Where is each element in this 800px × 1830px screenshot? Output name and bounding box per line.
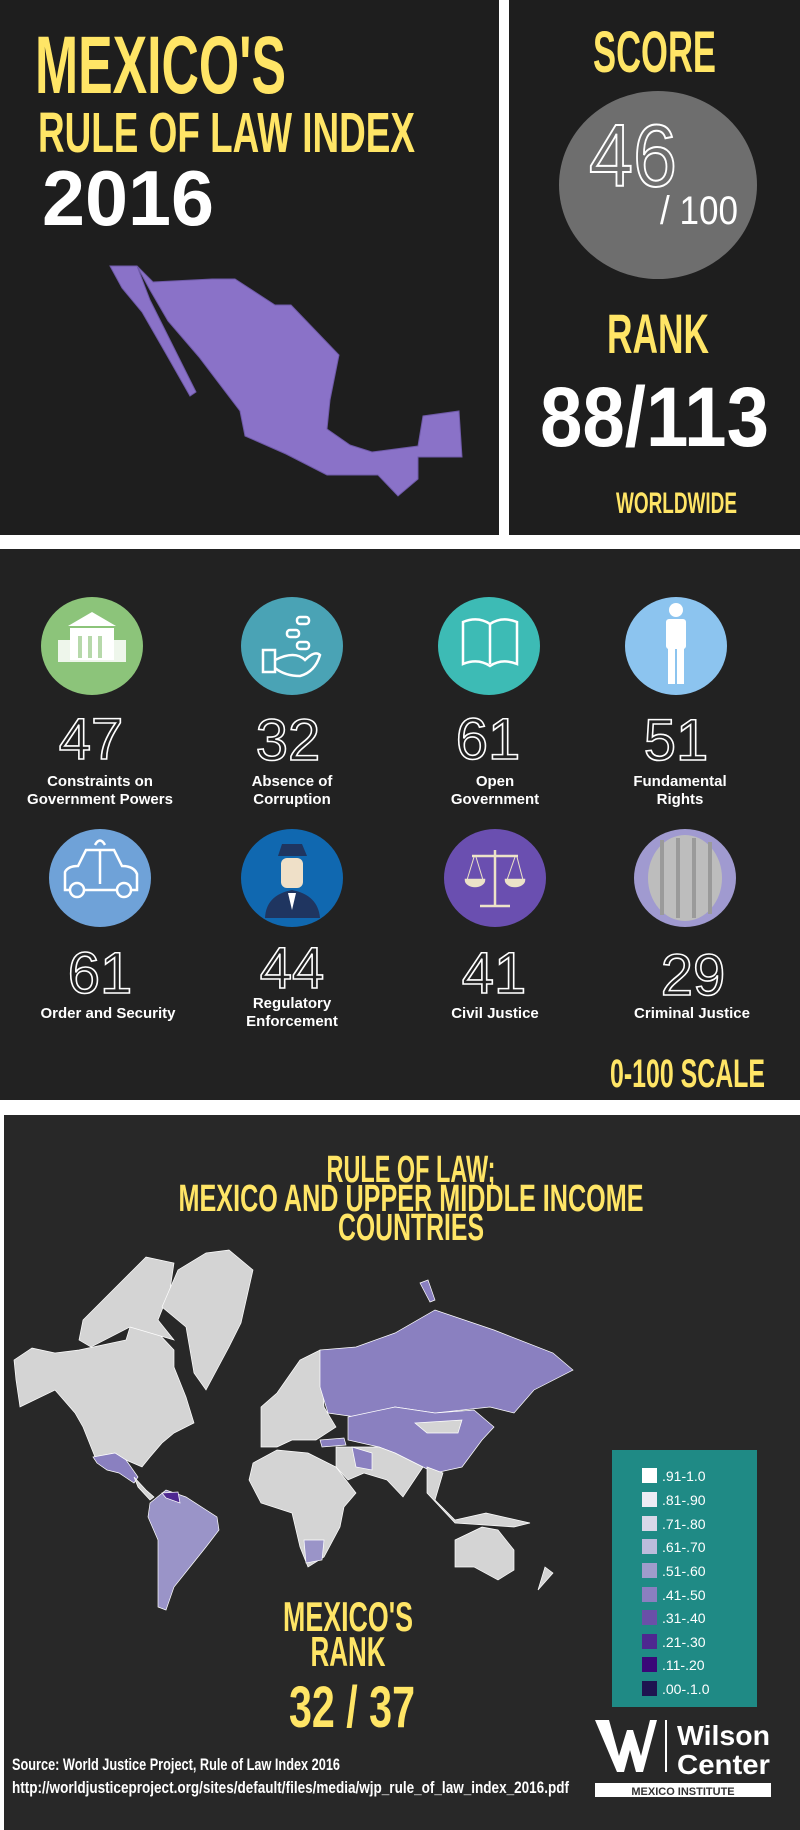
score circle: 46: [589, 106, 677, 205]
logo: wilson center: [595, 1720, 771, 1798]
label: fundamental rights: Fundamental: [633, 773, 727, 790]
legend: .81-.90: [662, 1492, 706, 1508]
panel: title: [0, 0, 499, 535]
logo: wilson center: Center: [677, 1749, 770, 1780]
label: fundamental rights: Rights: [657, 791, 703, 808]
label: civil justice: Civil Justice: [451, 1005, 539, 1022]
label: open government: Government: [451, 791, 539, 808]
legend: .11-.20: [662, 1657, 705, 1673]
legend: .71-.80: [662, 1516, 706, 1532]
label: corruption: Corruption: [253, 791, 331, 808]
source text: http://worldjusticeproject.org/sites/default/files/media/wjp_rule_of_law_index_2016.pdf: [12, 1778, 569, 1797]
panel: factors: [0, 549, 800, 1100]
score: 47: 47: [59, 707, 123, 772]
score: 51: 51: [644, 708, 708, 773]
source text: [12, 1755, 569, 1797]
label: constraints: Government Powers: [27, 791, 173, 808]
score: 61 order and security: 61: [68, 941, 132, 1006]
icon: person: [625, 597, 727, 695]
legend: .51-.60: [662, 1563, 706, 1579]
score: 29: 29: [661, 943, 725, 1008]
icon: hand with coins: [241, 597, 343, 695]
rank value 32/37: 32 / 37: [289, 1675, 415, 1740]
label: regulatory enforcement: Enforcement: [246, 1013, 338, 1030]
legend: [612, 1450, 757, 1707]
map: mexico: [110, 266, 462, 496]
source text: Source: World Justice Project, Rule of Law Index 2016: [12, 1755, 340, 1774]
label: corruption: Absence of: [252, 773, 333, 790]
score circle: [559, 91, 757, 279]
label: regulatory enforcement: Regulatory: [253, 995, 332, 1012]
score: 41: 41: [462, 941, 526, 1006]
legend: .41-.50: [662, 1587, 706, 1603]
heading: mexico's rank: RANK: [310, 1628, 386, 1675]
heading: mexico's rank: MEXICO'S: [283, 1593, 413, 1640]
legend: .00-.1.0: [662, 1681, 710, 1697]
heading: mexico's rank: [283, 1593, 413, 1675]
score: 44: 44: [260, 936, 324, 1001]
panel: score and rank: [509, 0, 800, 535]
legend: .31-.40: [662, 1610, 706, 1626]
heading: map title: [178, 1149, 644, 1249]
heading: map title: COUNTRIES: [338, 1207, 484, 1249]
heading: mexico's: MEXICO'S: [35, 20, 286, 111]
label: criminal justice: Criminal Justice: [634, 1005, 750, 1022]
rank value: 88/113: [540, 370, 769, 464]
legend: .21-.30: [662, 1634, 706, 1650]
icon: open book: [438, 597, 540, 695]
heading: score: SCORE: [593, 20, 716, 85]
heading: map title: RULE OF LAW;: [326, 1149, 496, 1191]
heading: rule of law index: RULE OF LAW INDEX: [38, 101, 415, 165]
heading: rank: RANK: [607, 302, 709, 365]
icon: police car: [49, 829, 151, 927]
label: constraints: Constraints on: [47, 773, 153, 790]
chart: world map: [14, 1250, 573, 1610]
legend: .61-.70: [662, 1539, 706, 1555]
legend: .91-1.0: [662, 1468, 706, 1484]
label: order and security: Order and Security: [40, 1005, 176, 1022]
icon: government building: [41, 597, 143, 695]
icon: prison cell: [634, 829, 736, 927]
icon: police officer: [241, 829, 343, 927]
panel: world map section: [4, 1115, 800, 1830]
logo: wilson center: MEXICO INSTITUTE: [631, 1786, 735, 1798]
score: 32: 32: [256, 708, 320, 773]
icon: scales of justice: [444, 829, 546, 927]
logo: wilson center: Wilson: [677, 1720, 770, 1751]
score circle: / 100: [660, 189, 738, 233]
heading: 2016: 2016: [42, 154, 214, 242]
score: 61 open government: 61: [456, 707, 520, 772]
label: open government: Open: [476, 773, 514, 790]
